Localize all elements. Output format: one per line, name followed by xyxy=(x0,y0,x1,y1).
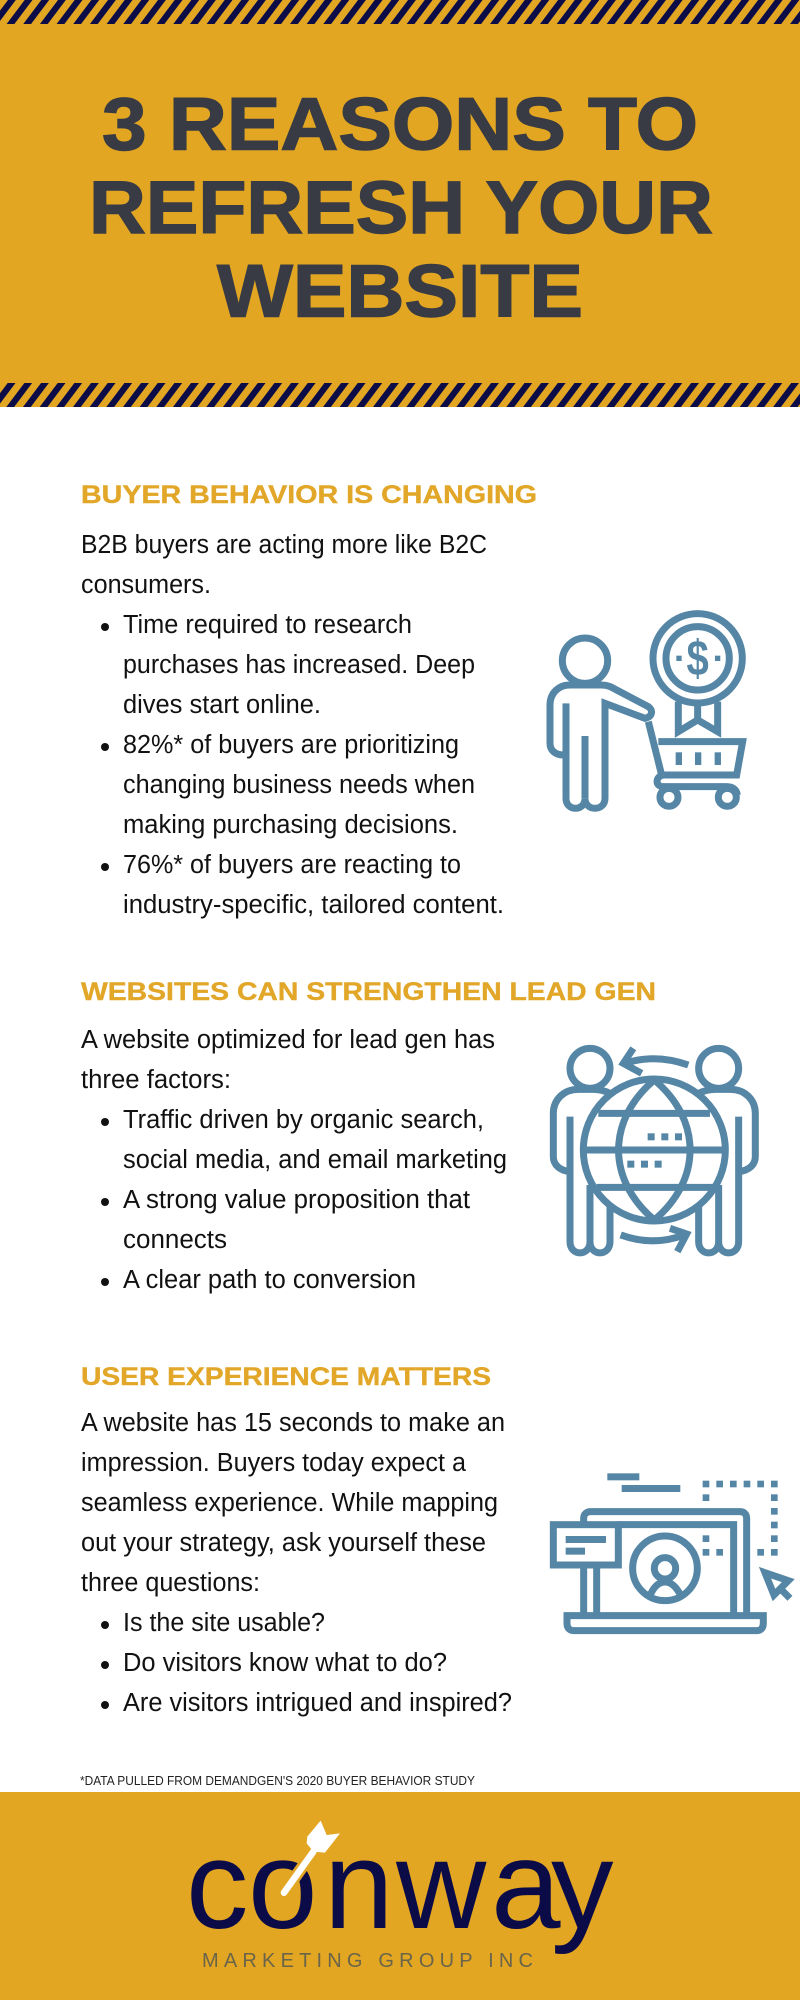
text block: lead gen: three factors: xyxy=(81,1066,231,1094)
text block: buyer behavior: changing business needs when xyxy=(123,771,475,799)
text block: lead gen: social media, and email marketing xyxy=(123,1146,507,1174)
heading: buyer behavior: BUYER BEHAVIOR IS CHANGING xyxy=(81,481,537,509)
heading: lead gen: WEBSITES CAN STRENGTHEN LEAD GEN xyxy=(81,978,656,1006)
title: REFRESH YOUR xyxy=(89,166,713,249)
text block: buyer behavior xyxy=(81,531,504,919)
text block: lead gen: connects xyxy=(123,1226,227,1254)
panel: user experience xyxy=(81,1363,790,1717)
logo: conway: conway xyxy=(186,1816,614,1955)
text block: buyer behavior: dives start online. xyxy=(123,691,321,719)
icon: shopper with cart and dollar medal xyxy=(550,614,743,808)
icon: shopper with cart and dollar medal: $ xyxy=(687,630,709,686)
footnote: *DATA PULLED FROM DEMANDGEN'S 2020 BUYER BEHAVIOR STUDY xyxy=(80,1773,475,1788)
text block: buyer behavior: 76%* of buyers are reacting to xyxy=(123,851,461,879)
text block: lead gen: Traffic driven by organic search, xyxy=(123,1106,484,1134)
text block: user experience: Is the site usable? xyxy=(123,1609,325,1637)
heading: user experience: USER EXPERIENCE MATTERS xyxy=(81,1363,491,1391)
text block: user experience: seamless experience. While mapping xyxy=(81,1489,498,1517)
panel: buyer behavior xyxy=(81,481,743,919)
icon: two people around a globe xyxy=(553,1048,755,1253)
panel: lead gen xyxy=(81,978,755,1294)
title: 3 REASONS TO xyxy=(102,82,698,166)
text block: user experience: A website has 15 seconds to make an xyxy=(81,1409,505,1437)
text block: buyer behavior: 82%* of buyers are prioritizing xyxy=(123,731,459,759)
text block: user experience: Do visitors know what to do? xyxy=(123,1649,447,1677)
text block: buyer behavior: Time required to research xyxy=(123,611,412,639)
text block: buyer behavior: making purchasing decisions. xyxy=(123,811,458,839)
text block: buyer behavior: industry-specific, tailored content. xyxy=(123,891,504,919)
text block: lead gen: A strong value proposition that xyxy=(123,1186,470,1214)
text block: user experience: out your strategy, ask yourself these xyxy=(81,1529,486,1557)
title xyxy=(89,82,713,332)
text block: lead gen: A clear path to conversion xyxy=(123,1266,416,1294)
text block: user experience: Are visitors intrigued and inspired? xyxy=(123,1689,512,1717)
footer band with logo xyxy=(0,1792,800,2000)
icon: dart xyxy=(284,1821,340,1893)
text block: user experience: three questions: xyxy=(81,1569,260,1597)
header banner xyxy=(0,0,800,407)
text block: buyer behavior: purchases has increased. Deep xyxy=(123,651,475,679)
text block: lead gen xyxy=(81,1026,507,1294)
text block: user experience: impression. Buyers today expect a xyxy=(81,1449,467,1477)
icon: laptop with profile and cursor xyxy=(553,1473,790,1631)
text block: lead gen: A website optimized for lead gen has xyxy=(81,1026,495,1054)
text block: user experience xyxy=(81,1409,512,1717)
logo tagline: MARKETING GROUP INC xyxy=(202,1950,533,1972)
text block: buyer behavior: B2B buyers are acting more like B2C xyxy=(81,531,487,559)
title: WEBSITE xyxy=(217,250,583,332)
text block: buyer behavior: consumers. xyxy=(81,571,211,599)
